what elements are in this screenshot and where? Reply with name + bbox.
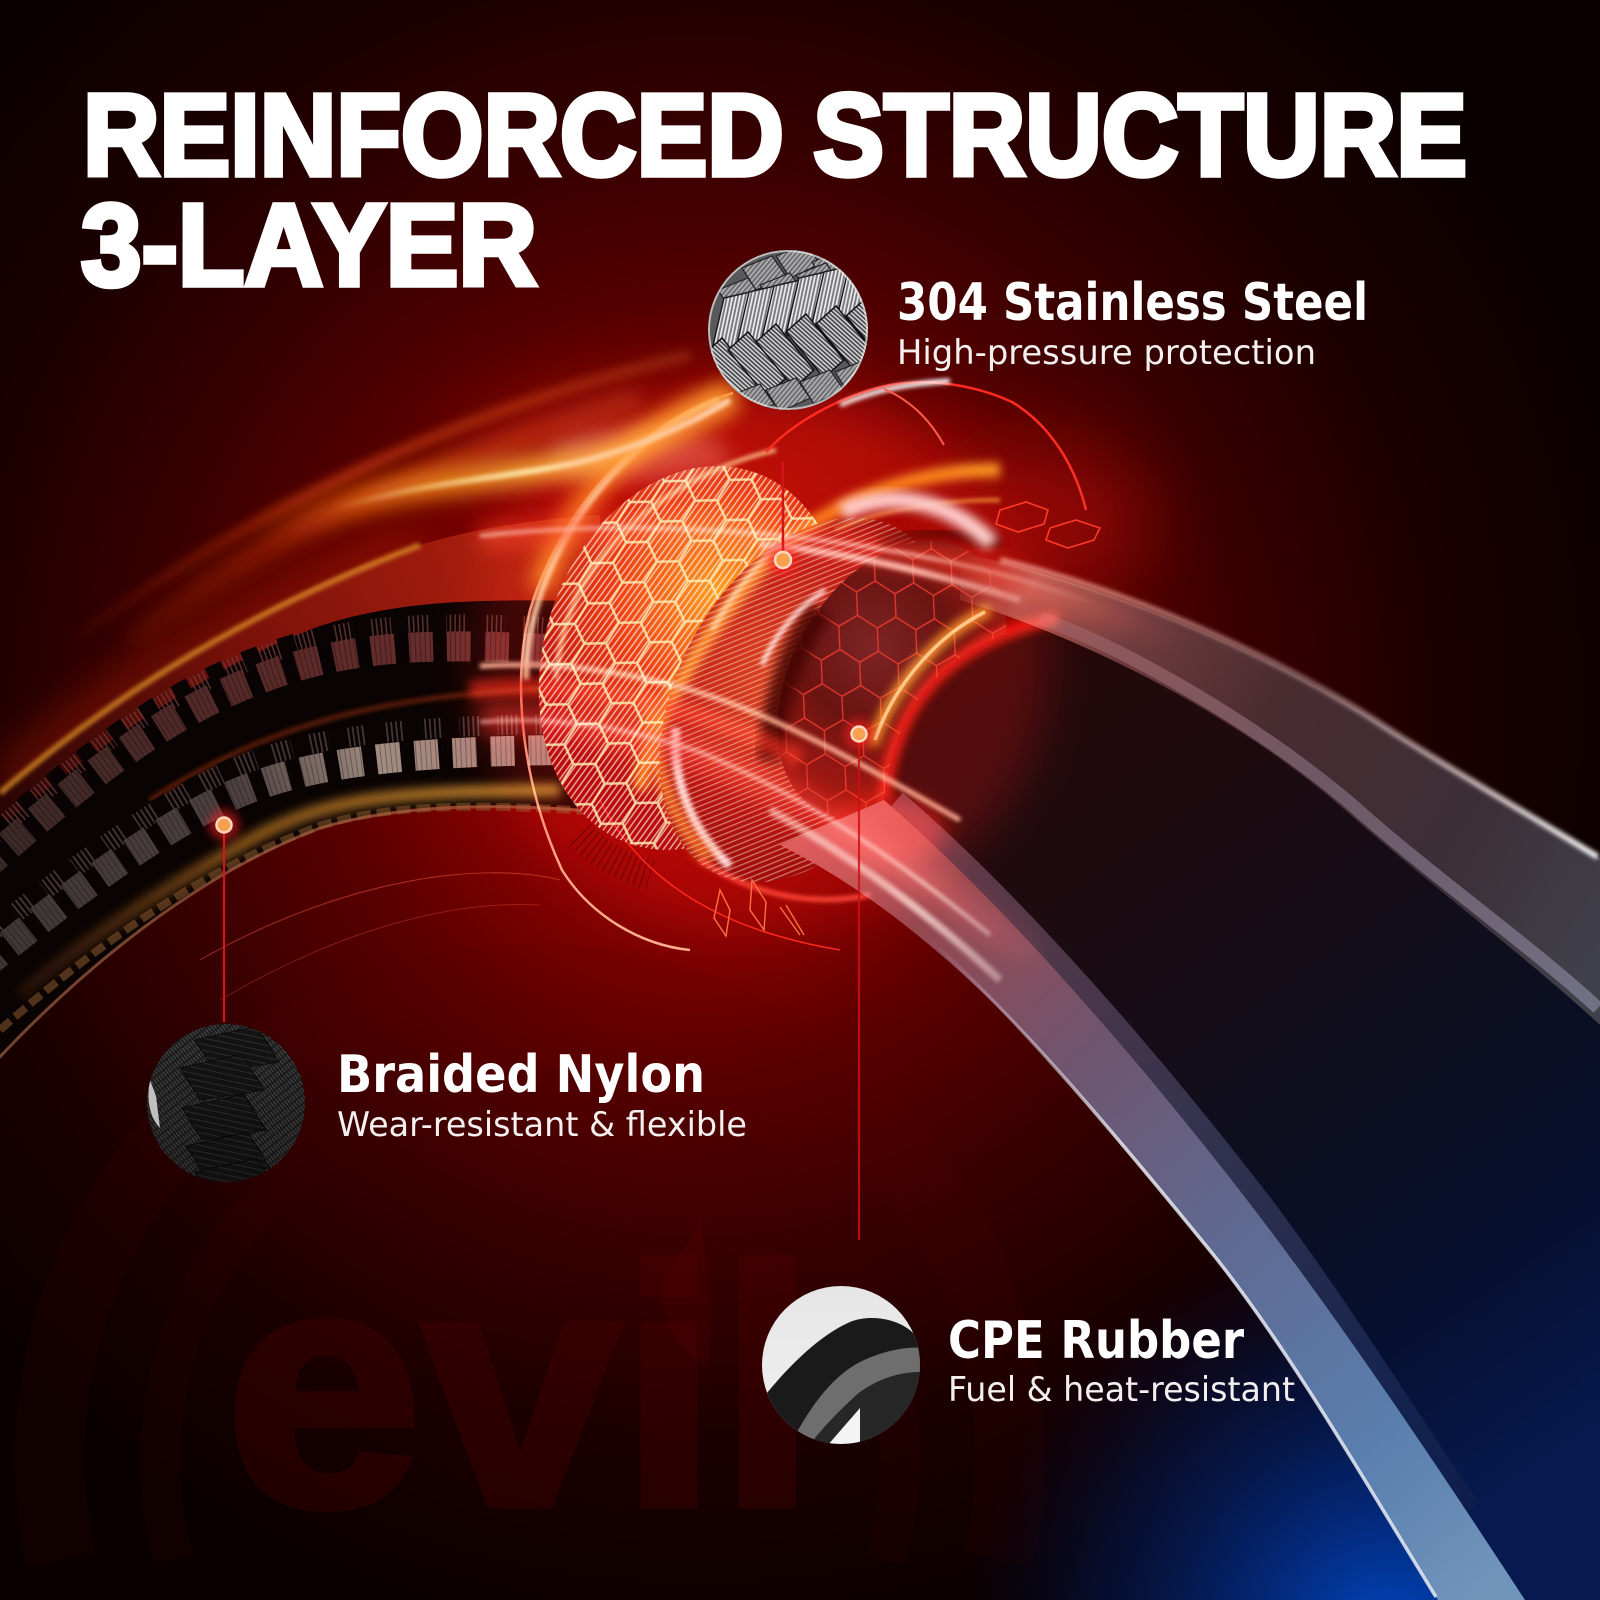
crossing streaks middle [480, 665, 960, 820]
crossing streaks upper [480, 529, 1180, 640]
label: 304 stainless steel: High-pressure protection [897, 333, 1316, 373]
top red white arc [766, 382, 1086, 510]
rubber rim glow [884, 617, 1058, 801]
logo watermark [50, 978, 1010, 1578]
label: braided nylon [337, 1045, 747, 1145]
upper braid hatched row [0, 624, 560, 846]
marker dot: rubber [844, 719, 874, 749]
hexagon layer two: nylon cutaway [600, 468, 1010, 932]
hexagon layer one: steel braid cutaway [491, 426, 893, 890]
hexagon layer three: dark rubber cutaway [730, 500, 1054, 860]
black body [0, 600, 620, 1062]
inner dark [814, 1372, 920, 1444]
CPE rubber hose section [780, 552, 1600, 1600]
marker dot: nylon [209, 810, 239, 840]
pink halo behind the ring top [550, 429, 730, 481]
marker dot: steel [767, 544, 799, 576]
icon: braided nylon circle [147, 1024, 305, 1182]
title line two: 3-LAYER [81, 180, 537, 310]
red sheath [0, 515, 600, 900]
icon: stainless steel braid circle [708, 250, 868, 410]
gold sweep [240, 398, 735, 540]
callout line: rubber [858, 742, 860, 1240]
label: 304 stainless steel: 304 Stainless Steel [897, 273, 1368, 333]
energy rings and light streaks [200, 381, 1180, 1000]
upper inner strip [1040, 618, 1598, 1008]
mid gold arc [640, 470, 1000, 790]
general red bloom [470, 390, 1050, 930]
grey highlight band [797, 1348, 922, 1442]
lower band [780, 800, 1525, 1600]
crossing streaks lower [480, 719, 1040, 960]
callout line: nylon [223, 834, 225, 1022]
dark frayed fibres under the cutaway [580, 835, 650, 875]
interior [884, 617, 1600, 1600]
dark tube [767, 1318, 925, 1450]
upper rim highlight [1000, 560, 1598, 857]
label: CPE rubber: CPE Rubber [948, 1311, 1244, 1371]
lower inner strip [895, 802, 1470, 1510]
label: 304 stainless steel [897, 273, 1368, 373]
title [81, 70, 1467, 310]
label: CPE rubber: Fuel & heat-resistant [948, 1370, 1295, 1410]
broken hexagons trailing off [714, 502, 1100, 936]
lower braid solid row [0, 750, 560, 968]
callout line: steel [782, 462, 784, 552]
title line one: REINFORCED STRUCTURE [83, 70, 1467, 200]
blue glow [950, 1200, 1600, 1600]
label: CPE rubber [948, 1311, 1295, 1410]
white blobs on layer two [842, 500, 992, 544]
gold band [20, 790, 560, 995]
middle red streak [150, 688, 560, 800]
outer glow streaks behind the hose [0, 355, 1150, 790]
label: braided nylon: Braided Nylon [337, 1045, 705, 1105]
lower rim highlight [930, 940, 1436, 1597]
upper braid solid row [0, 646, 560, 870]
upper band [960, 552, 1600, 1025]
lower big ring [700, 860, 870, 899]
sheath highlight [0, 545, 420, 793]
label: braided nylon: Wear-resistant & flexible [337, 1105, 747, 1145]
white gap [830, 1408, 860, 1444]
outer thin ring [521, 393, 733, 950]
lower braid hatched row [0, 724, 560, 942]
logo watermark: evil [225, 1198, 817, 1578]
red bloom on the band corner [825, 796, 945, 864]
faint arcs under the hose [200, 873, 560, 960]
icon: CPE rubber tube circle [760, 1285, 925, 1450]
braided nylon hose section [0, 515, 620, 1062]
